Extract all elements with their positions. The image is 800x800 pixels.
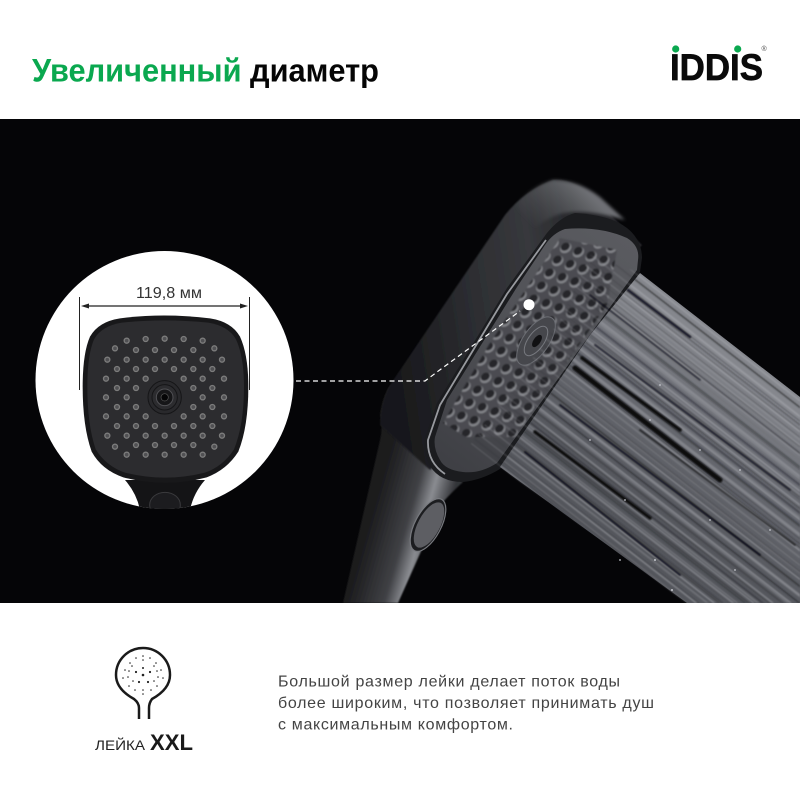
icon: XXL shower head <box>116 648 170 719</box>
highlight line on the rim <box>428 240 546 474</box>
shower handle <box>343 385 463 603</box>
inset central nozzle <box>148 381 181 414</box>
shower head top highlight <box>523 178 625 221</box>
icon caption: ЛЕЙКА <box>95 736 146 753</box>
water droplets <box>589 384 771 591</box>
callout: white dot <box>524 299 534 310</box>
dark gaps in the spray <box>525 290 795 575</box>
inset nozzles <box>103 336 226 457</box>
dimension: width 119,8 mm <box>80 285 250 390</box>
logo: IDDIS: ® <box>762 45 768 53</box>
inset handle <box>125 480 205 510</box>
icon spray dots <box>122 655 164 695</box>
icon caption <box>95 730 193 755</box>
inset head outline <box>83 315 248 483</box>
inset: front view of shower head <box>83 315 248 518</box>
side button <box>410 498 446 552</box>
central nozzle <box>516 316 556 366</box>
water spray <box>470 255 800 603</box>
icon caption: XXL <box>150 730 193 755</box>
inset button <box>149 492 181 509</box>
nozzle holes <box>443 238 617 437</box>
description text: Большой размер лейки делает поток воды <box>278 674 620 690</box>
inset circle <box>36 251 294 509</box>
spray over the face <box>470 255 640 467</box>
callout: dashed leader line <box>296 311 520 381</box>
face plate <box>435 228 638 472</box>
shower head back surface <box>380 180 642 470</box>
photo panel: shower head with water <box>0 119 800 603</box>
rim of the face <box>424 213 642 482</box>
logo: IDDIS: IDDIS <box>670 47 763 88</box>
description text: более широким, что позволяет принимать душ <box>278 695 654 712</box>
inset head face <box>87 320 244 478</box>
description text <box>278 674 654 734</box>
dimension: width 119,8 mm: 119,8 мм <box>136 285 202 302</box>
title: Увеличенный диаметр <box>32 52 379 88</box>
description text: с максимальным комфортом. <box>278 716 513 734</box>
